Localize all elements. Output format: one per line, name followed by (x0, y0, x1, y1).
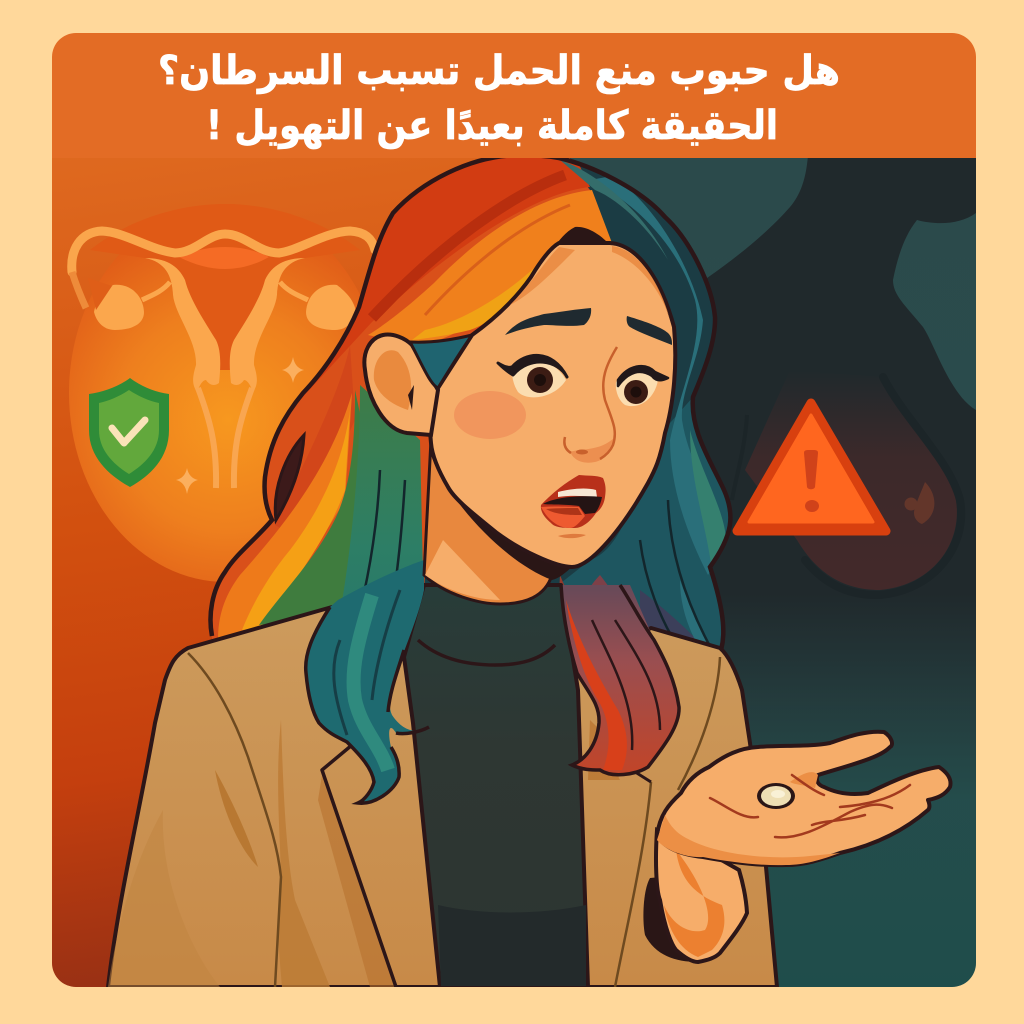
cheek blush (454, 391, 526, 439)
title (158, 48, 840, 149)
background: dark right side (570, 150, 980, 990)
neck highlight (425, 540, 500, 600)
icon: sparkles (176, 357, 304, 494)
dark breast shape (745, 395, 957, 590)
sweater: collar line (418, 640, 555, 665)
title: هل حبوب منع الحمل تسبب السرطان؟ (158, 48, 840, 94)
neck (424, 440, 560, 604)
hair: teal behind ear (410, 335, 472, 388)
character: back hair (211, 167, 713, 640)
ear (364, 335, 438, 435)
jacket: shading (108, 653, 720, 987)
jacket: right lapel edge (636, 773, 652, 784)
arm and cuff (643, 830, 747, 962)
hair: fringe band (558, 226, 606, 242)
eye: left (498, 355, 567, 397)
jacket (108, 607, 777, 987)
glowing circle (69, 256, 360, 582)
icon: green shield (89, 378, 169, 487)
face (429, 243, 675, 567)
icon: pill (757, 783, 795, 809)
hair: outline (211, 155, 730, 660)
hand with pill (657, 732, 951, 865)
eyebrows (505, 308, 672, 345)
dark silhouette (695, 158, 976, 752)
eye: right (616, 366, 668, 406)
hair: left lock (306, 560, 429, 803)
hair: right lock (561, 585, 679, 775)
background: warm left side (52, 150, 582, 990)
nose (564, 347, 617, 463)
jacket: left lapel edge (322, 740, 396, 987)
mouth (541, 475, 606, 538)
sweater: lower shading (438, 905, 586, 986)
jaw shadow (432, 456, 570, 580)
icon: uterus (72, 204, 375, 488)
header band (52, 33, 976, 158)
sweater (404, 585, 588, 987)
face: forehead shade (510, 246, 670, 318)
icon: warning triangle (737, 403, 886, 531)
title: الحقيقة كاملة بعيدًا عن التهويل ! (206, 103, 778, 149)
hair: small loop (275, 435, 304, 520)
hair: coloured strands (212, 158, 728, 646)
